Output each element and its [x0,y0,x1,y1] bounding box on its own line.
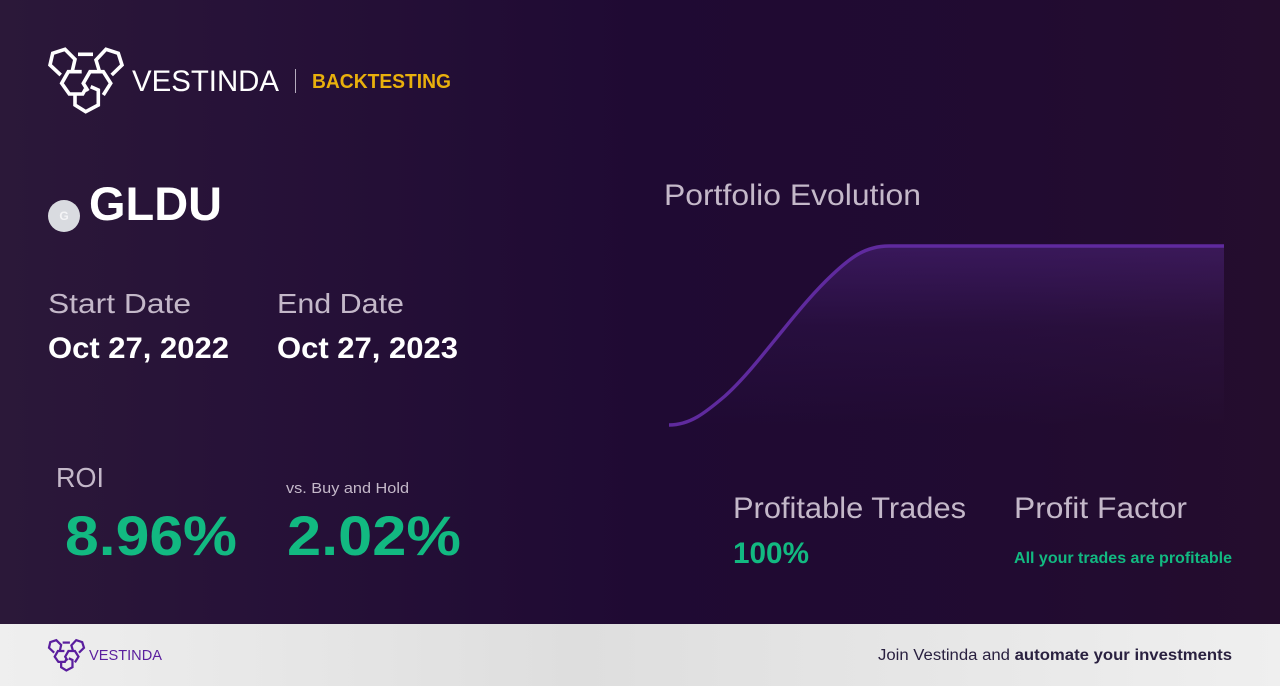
profitable trades metric [733,492,966,570]
heading: portfolio evolution: Portfolio Evolution [664,179,921,212]
icon: ticker badge: G [59,209,69,223]
footer logo [49,640,162,670]
end date [277,288,458,365]
ROI metric: ROI [56,462,104,493]
end date: Oct 27, 2023 [277,332,458,365]
vs buy and hold metric: vs. Buy and Hold [286,480,409,497]
area chart: portfolio evolution [669,246,1224,425]
vs buy and hold metric [286,480,461,567]
footer panel [0,624,1280,686]
icon: ticker badge [48,200,80,232]
start date: Oct 27, 2022 [48,332,229,365]
profit factor metric [1014,492,1232,567]
footer call to action: Join Vestinda and automate your investments [878,647,1232,664]
ROI metric [56,462,237,567]
profit factor metric: Profit Factor [1014,492,1187,525]
wordmark: VESTINDA [132,65,279,98]
start date [48,288,229,365]
icon: hexagon logo [50,49,122,112]
icon: footer hexagon logo [49,640,84,670]
start date: Start Date [48,288,191,319]
profitable trades metric: Profitable Trades [733,492,966,525]
footer wordmark: VESTINDA [89,647,162,664]
header divider [295,69,296,93]
ticker block [48,177,222,232]
heading: backtesting: BACKTESTING [312,71,451,93]
end date: End Date [277,288,404,319]
header logo [50,49,279,112]
profitable trades metric: 100% [733,537,809,570]
vs buy and hold metric: 2.02% [287,504,461,567]
ROI metric: 8.96% [65,504,237,567]
ticker name: GLDU [89,177,222,230]
profit factor metric: All your trades are profitable [1014,550,1232,567]
